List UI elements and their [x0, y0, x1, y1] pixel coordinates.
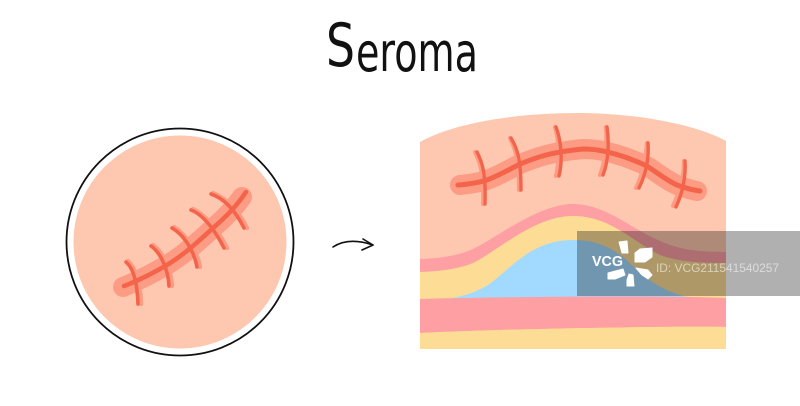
blue seroma fluid [445, 240, 700, 299]
title: S [326, 11, 355, 81]
watermark logo petals [608, 241, 652, 286]
panel: tissue cross-section [420, 113, 726, 349]
bottom yellow layer [420, 327, 726, 349]
muscle band [420, 296, 726, 333]
watermark logo text: VCG [592, 254, 623, 270]
arrow [333, 239, 373, 250]
yellow fat layer [420, 216, 726, 349]
title: eroma [356, 21, 478, 84]
pink dermis layer [420, 204, 726, 349]
panel: skin surface circle [66, 128, 294, 356]
icon: sutured incision on cross-section [458, 127, 700, 207]
watermark id text: ID: VCG211541540257 [656, 261, 779, 275]
icon: sutured incision on skin [123, 192, 247, 304]
watermark band [577, 231, 800, 296]
